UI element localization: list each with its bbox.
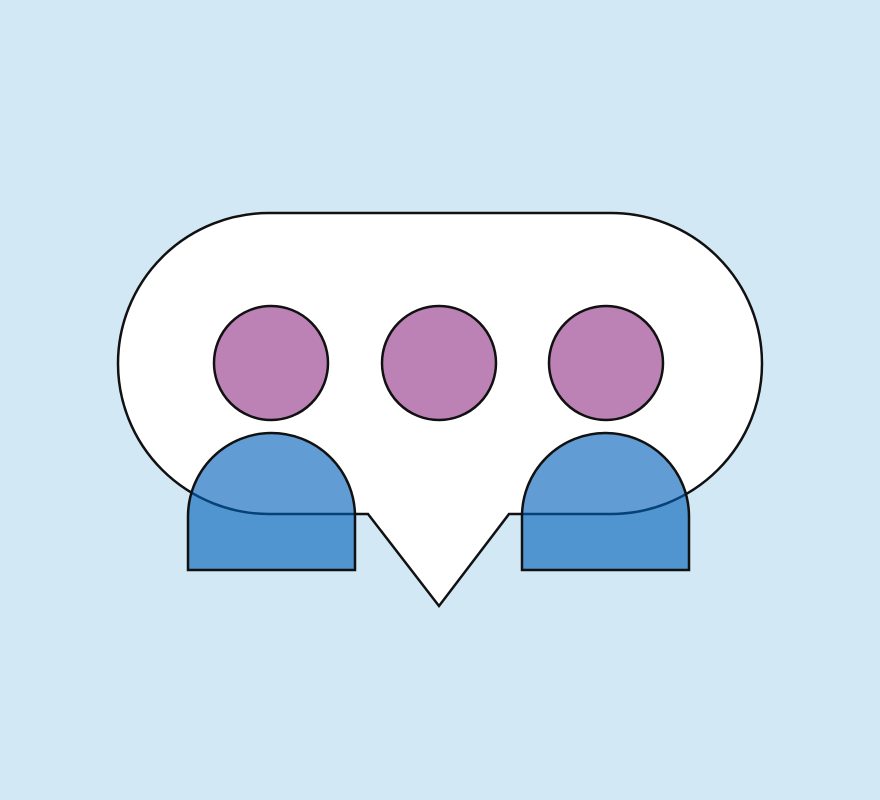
icon: middle head [382,306,496,420]
icon: left person [188,306,355,570]
speech bubble [118,213,762,606]
icon: right person [522,306,689,570]
